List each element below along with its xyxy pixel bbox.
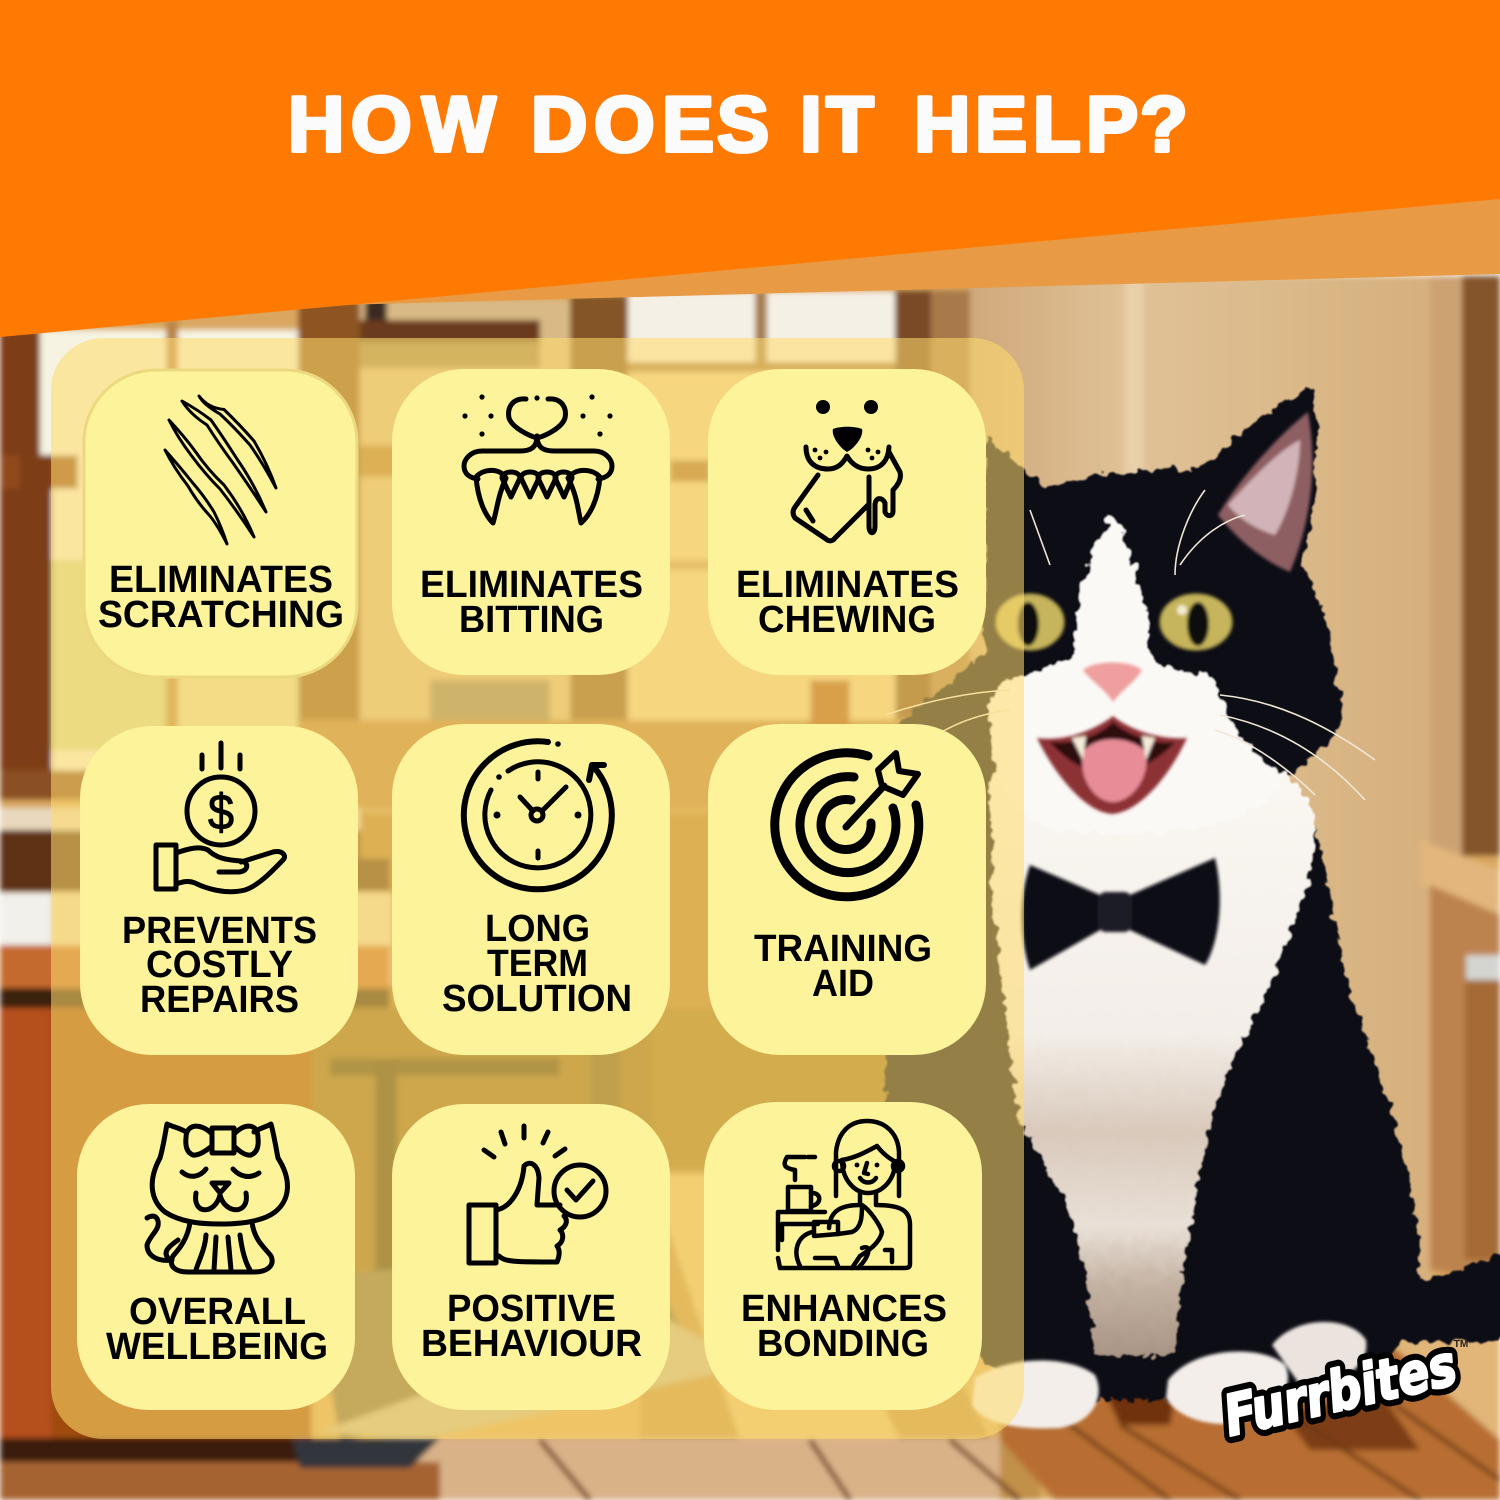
card: eliminates chewing — [708, 369, 986, 675]
label — [736, 564, 959, 641]
label: WELLBEING — [106, 1326, 328, 1368]
cat right ear inner — [1218, 412, 1312, 572]
header main band — [0, 0, 1500, 337]
right wall — [970, 276, 1432, 1346]
cat left eye — [995, 593, 1065, 651]
label: TERM — [487, 943, 588, 985]
card: enhances bonding — [704, 1102, 982, 1410]
label: REPAIRS — [140, 979, 299, 1021]
cat face blaze — [989, 515, 1285, 833]
card: eliminates scratching — [84, 370, 357, 677]
shelf wall — [360, 300, 570, 820]
cabinet — [0, 1008, 312, 1440]
label — [420, 564, 643, 641]
cat mouth — [1037, 716, 1187, 814]
card: overall wellbeing — [77, 1104, 355, 1410]
label: ELIMINATES — [420, 564, 643, 606]
label: TRAINING — [754, 928, 932, 970]
icon: target with arrow — [775, 753, 919, 897]
icon: coin in hand — [156, 743, 285, 892]
label: SCRATCHING — [98, 594, 344, 636]
icon: fangs — [462, 394, 613, 523]
label: ELIMINATES — [109, 559, 333, 601]
label: AID — [812, 963, 874, 1005]
card: eliminates biting — [392, 369, 670, 675]
label — [421, 1288, 642, 1365]
label: CHEWING — [758, 599, 936, 641]
floor — [640, 1170, 1040, 1500]
window upper — [628, 292, 895, 367]
right floor — [1000, 1335, 1500, 1500]
cat chest — [990, 770, 1316, 1355]
icon: dog chewing phone — [793, 400, 900, 541]
label — [754, 928, 932, 1005]
title: HOW DOES IT HELP? — [288, 80, 1188, 168]
cat bow tie — [1022, 858, 1220, 970]
window left — [0, 330, 42, 780]
icon: claw marks — [165, 396, 276, 544]
counter band left — [0, 808, 360, 832]
cat tail — [1400, 1250, 1500, 1342]
icon: coin in hand: $ — [208, 784, 234, 840]
card: long term solution — [392, 724, 670, 1055]
label: LONG — [485, 908, 590, 950]
icon: woman holding cat — [778, 1121, 910, 1268]
label: PREVENTS — [122, 910, 317, 952]
label: BEHAVIOUR — [421, 1323, 642, 1365]
card: training aid — [708, 724, 986, 1055]
cat head — [885, 388, 1341, 830]
card: prevents costly repairs — [80, 726, 358, 1055]
label — [741, 1288, 947, 1365]
label — [106, 1291, 328, 1368]
label — [122, 910, 317, 1021]
label — [98, 559, 344, 636]
illustration: black and white cat with bow tie — [885, 388, 1500, 1428]
cat nose — [1083, 662, 1142, 702]
cat right eye — [1159, 593, 1233, 651]
icon: thumbs up with check — [469, 1126, 606, 1263]
label — [442, 908, 632, 1020]
cat body — [885, 790, 1420, 1400]
label: ENHANCES — [741, 1288, 947, 1330]
book — [310, 1255, 705, 1440]
label: ELIMINATES — [736, 564, 959, 606]
label: BITTING — [459, 599, 604, 641]
header: orange banner — [0, 0, 1500, 337]
label: POSITIVE — [447, 1288, 616, 1330]
translucent yellow panel — [51, 338, 1024, 1439]
label: BONDING — [757, 1323, 929, 1365]
icon: clock with arrow — [464, 741, 612, 889]
cat paws — [972, 1322, 1366, 1428]
label: COSTLY — [146, 944, 293, 986]
card: positive behaviour — [392, 1104, 670, 1410]
icon: sleeping cat with bow — [147, 1124, 287, 1272]
label: OVERALL — [129, 1291, 306, 1333]
header accent strip — [300, 198, 1500, 306]
label: SOLUTION — [442, 978, 632, 1020]
cat whiskers — [885, 490, 1375, 800]
trademark: TM — [1454, 1339, 1468, 1350]
